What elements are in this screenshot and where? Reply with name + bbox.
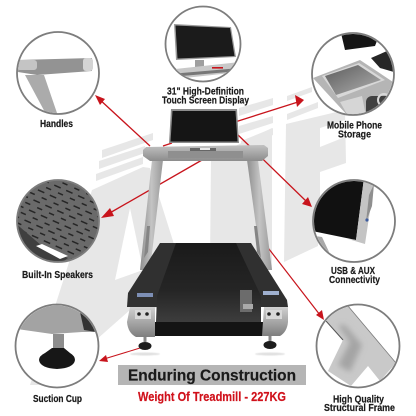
label: mobile phone storage [327, 120, 382, 140]
treadmill: deck frame [127, 243, 288, 307]
label: mobile phone storage: Storage [338, 128, 371, 140]
background watermark logo [30, 87, 346, 385]
panel: suction cup [14, 300, 100, 388]
label: USB and AUX connectivity: USB & AUX [331, 265, 375, 277]
panel: structural frame [316, 304, 400, 388]
panel: built-in speakers [14, 180, 99, 264]
label: structural frame: High Quality [333, 394, 384, 406]
panel: handles [17, 32, 99, 116]
treadmill: right upright [247, 160, 272, 270]
arrow: suction cup [99, 348, 140, 362]
label: mobile phone storage: Mobile Phone [327, 120, 382, 132]
arrow: structural frame [262, 240, 324, 320]
subtitle: treadmill weight: Weight Of Treadmill - 227KG [138, 389, 286, 404]
treadmill: front roller [155, 322, 265, 336]
treadmill: feet [130, 336, 285, 356]
label: handles: Handles [40, 118, 73, 130]
arrow: handles [95, 95, 150, 146]
treadmill: left upright [140, 160, 163, 270]
label: structural frame [324, 394, 395, 414]
label: touch screen display: Touch Screen Display [162, 94, 249, 106]
label: touch screen display: 31" High-Definition [167, 86, 244, 98]
label: structural frame: Structural Frame [324, 402, 395, 414]
treadmill: touch screen [169, 109, 239, 143]
arrow: mobile phone storage [235, 95, 304, 122]
treadmill: display labels [137, 293, 153, 297]
banner: enduring construction: Enduring Construction [128, 368, 296, 384]
label: suction cup: Suction Cup [33, 393, 82, 405]
panel: USB and AUX connectivity [312, 178, 395, 262]
label: built-in speakers: Built-In Speakers [22, 269, 93, 281]
treadmill: left end cap [127, 307, 155, 337]
arrow: built-in speakers [101, 160, 202, 218]
arrow fragment: behind the screen [163, 143, 172, 146]
label: USB and AUX connectivity [329, 265, 380, 286]
arrow: USB and AUX [236, 133, 312, 207]
treadmill: handlebar crossbar [143, 145, 268, 161]
label: touch screen display [162, 86, 249, 106]
treadmill: right end cap [262, 307, 288, 336]
treadmill: running belt [156, 243, 261, 322]
treadmill [127, 109, 288, 356]
panel: mobile phone storage [312, 33, 396, 120]
panel: touch screen display [166, 6, 240, 82]
label: USB and AUX connectivity: Connectivity [329, 274, 380, 286]
